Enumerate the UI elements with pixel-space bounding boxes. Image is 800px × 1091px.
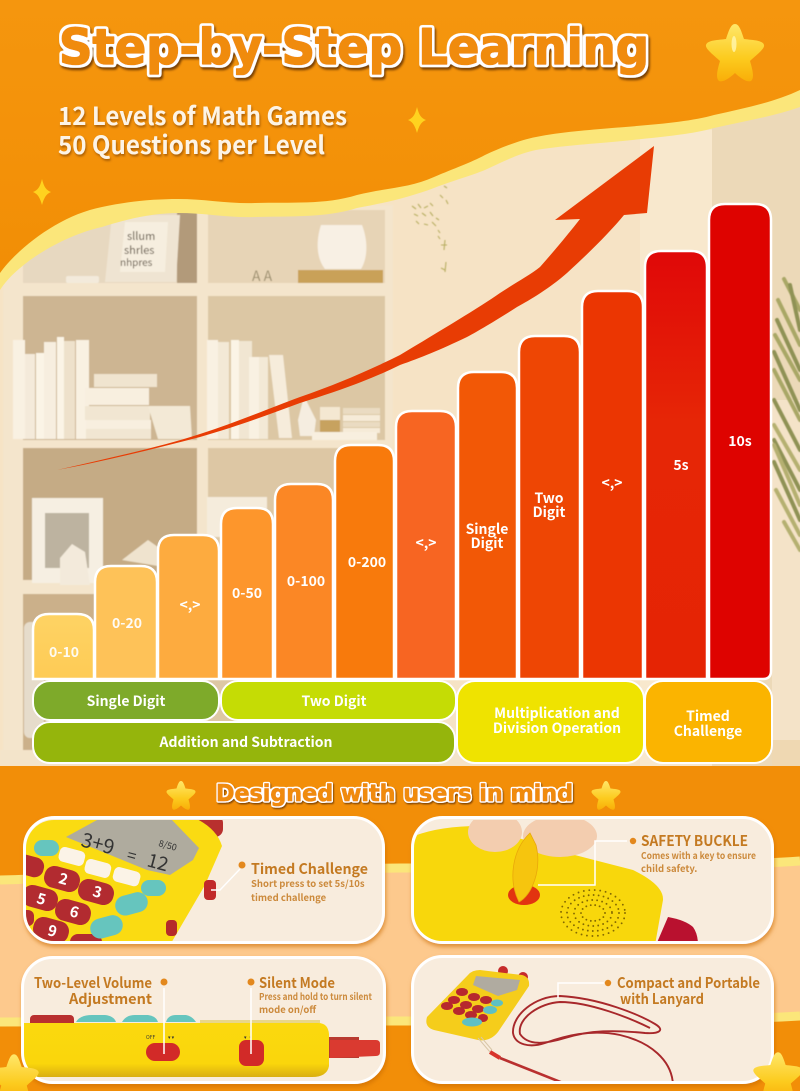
bottom section background	[0, 766, 800, 1091]
leader line	[558, 983, 604, 998]
bar chart: 12 levels	[33, 204, 771, 679]
feature text: volume: Adjustment	[68, 988, 152, 1009]
rising arrow	[57, 146, 654, 470]
bar single digit	[458, 372, 517, 679]
picture frame top: sllum	[127, 228, 155, 244]
feature text: with Lanyard	[620, 988, 704, 1009]
bar labels: 0-100	[287, 571, 325, 591]
bar labels: <,>	[415, 533, 437, 553]
photo: calculator close-up	[26, 820, 223, 941]
bar 5s	[645, 251, 707, 679]
bar 0-10	[33, 614, 94, 679]
marker dot	[630, 838, 636, 844]
icon: sparkle	[408, 107, 426, 133]
photo: calculator close-up: =	[125, 842, 140, 867]
feature text: timed challenge	[251, 890, 327, 904]
photo: calculator with lanyard	[426, 966, 673, 1085]
category: Multiplication and Division Operation: Division Operation	[493, 718, 621, 738]
feature text	[617, 972, 760, 1009]
bar labels: Digit	[533, 502, 565, 522]
marker dot	[238, 862, 246, 868]
specks on wall	[412, 186, 448, 272]
vase top	[318, 225, 366, 269]
feature text: volume: Two-Level Volume	[34, 972, 152, 993]
category: Two Digit: Two Digit	[301, 691, 367, 711]
bar labels: Digit	[471, 533, 503, 553]
icon: star left	[166, 781, 196, 810]
category: Single Digit: Single Digit	[87, 691, 166, 711]
category: Timed Challenge	[645, 681, 772, 763]
feature text: silent	[259, 972, 372, 1016]
feature text: silent: Silent Mode	[259, 972, 335, 993]
icon: sparkle left	[33, 179, 51, 205]
feature text: volume	[34, 972, 152, 1009]
icon: corner star right	[753, 1052, 800, 1091]
bar labels: Single	[466, 519, 508, 539]
feature text	[641, 830, 756, 875]
photo: calculator side view: ▾ ◦	[244, 1034, 253, 1041]
leader line	[538, 841, 627, 885]
panel: timed challenge	[12, 815, 383, 952]
marker dots	[160, 978, 254, 986]
feature text: silent: Press and hold to turn silent	[259, 989, 372, 1003]
header wave: orange with yellow band	[0, 0, 800, 290]
bar labels: <,>	[179, 595, 201, 615]
photo: calculator close-up: 3+9	[78, 824, 118, 860]
category: Addition and Subtraction	[33, 722, 455, 763]
photo: calculator back with key	[414, 812, 698, 945]
photo: calculator close-up: 8/50	[157, 836, 178, 854]
plant	[774, 279, 800, 550]
feature text: Short press to set 5s/10s	[251, 876, 365, 890]
A A decoration: A A	[252, 266, 273, 286]
bar labels: <,>	[601, 473, 623, 493]
category: Single Digit	[33, 681, 219, 720]
photo: calculator close-up: 2	[56, 867, 71, 890]
photo: calculator side view: ▾ ▾	[168, 1034, 175, 1041]
title: Step-by-Step Learning	[59, 19, 649, 76]
background wall	[0, 0, 800, 770]
picture frame top: nhpres	[120, 254, 153, 269]
category: Addition and Subtraction: Addition and Subtraction	[159, 732, 332, 752]
bar labels: 5s	[673, 455, 689, 475]
feature text: Timed Challenge	[251, 858, 368, 879]
category: Multiplication and Division Operation	[457, 681, 644, 763]
gold tray	[298, 270, 383, 283]
photo: calculator close-up: 5	[34, 887, 49, 910]
bar 0-20	[95, 566, 157, 679]
bar labels: 0-10	[49, 642, 79, 662]
photo frame lower	[24, 498, 165, 738]
category: Timed Challenge: Challenge	[674, 721, 742, 741]
feature text: Comes with a key to ensure	[641, 848, 756, 862]
photo: calculator close-up: 12	[144, 846, 172, 877]
category: Two Digit	[221, 681, 456, 720]
icon: big star	[706, 24, 764, 81]
bar labels: 10s	[728, 431, 752, 451]
bar 10s	[709, 204, 771, 679]
picture frame top	[105, 215, 180, 282]
category: Timed Challenge: Timed	[686, 706, 730, 726]
glass on top shelf	[66, 276, 99, 283]
feature text: silent: mode on/off	[259, 1002, 317, 1016]
panel: compact and portable	[412, 956, 772, 1085]
bar labels	[49, 431, 752, 662]
panel: safety buckle	[412, 812, 772, 945]
photo: calculator close-up: 3	[90, 880, 104, 903]
photo: calculator close-up: 6	[67, 900, 82, 923]
subtitle: 12 Levels of Math Games	[58, 97, 347, 133]
bar 0-200	[335, 445, 394, 679]
photo: calculator side view: OFF	[146, 1034, 155, 1041]
bar compare 3	[582, 291, 643, 679]
subtitle: 50 Questions per Level	[58, 126, 325, 162]
bar labels: 0-20	[112, 613, 142, 633]
icon: corner star left	[0, 1054, 39, 1091]
leader line	[211, 869, 240, 890]
bar two digit	[519, 336, 580, 679]
category: Multiplication and Division Operation: Multiplication and	[494, 703, 620, 723]
bar labels: Two	[534, 488, 564, 508]
bar compare 1	[158, 535, 219, 679]
books upper left	[13, 337, 192, 439]
leader lines	[164, 988, 251, 1054]
picture frame top: shrles	[124, 242, 154, 258]
photo: bookshelf	[0, 205, 460, 765]
subtitle	[58, 97, 347, 162]
panel: volume and silent mode	[20, 958, 384, 1082]
marker dot	[605, 980, 611, 986]
photo: calculator side view	[20, 1015, 380, 1077]
icon: star right	[591, 781, 621, 810]
bar compare 2	[396, 411, 456, 679]
feature text: Compact and Portable	[617, 972, 760, 993]
feature text	[251, 858, 368, 904]
books upper right	[207, 340, 380, 440]
photo: calculator close-up: 9	[45, 919, 60, 942]
bar 0-100	[275, 484, 333, 679]
bar 0-50	[221, 508, 273, 679]
bar labels: 0-200	[348, 552, 386, 572]
bar labels: 0-50	[232, 583, 262, 603]
feature text: SAFETY BUCKLE	[641, 830, 748, 851]
feature text: child safety.	[641, 861, 697, 875]
section heading: Designed with users in mind	[216, 781, 573, 807]
